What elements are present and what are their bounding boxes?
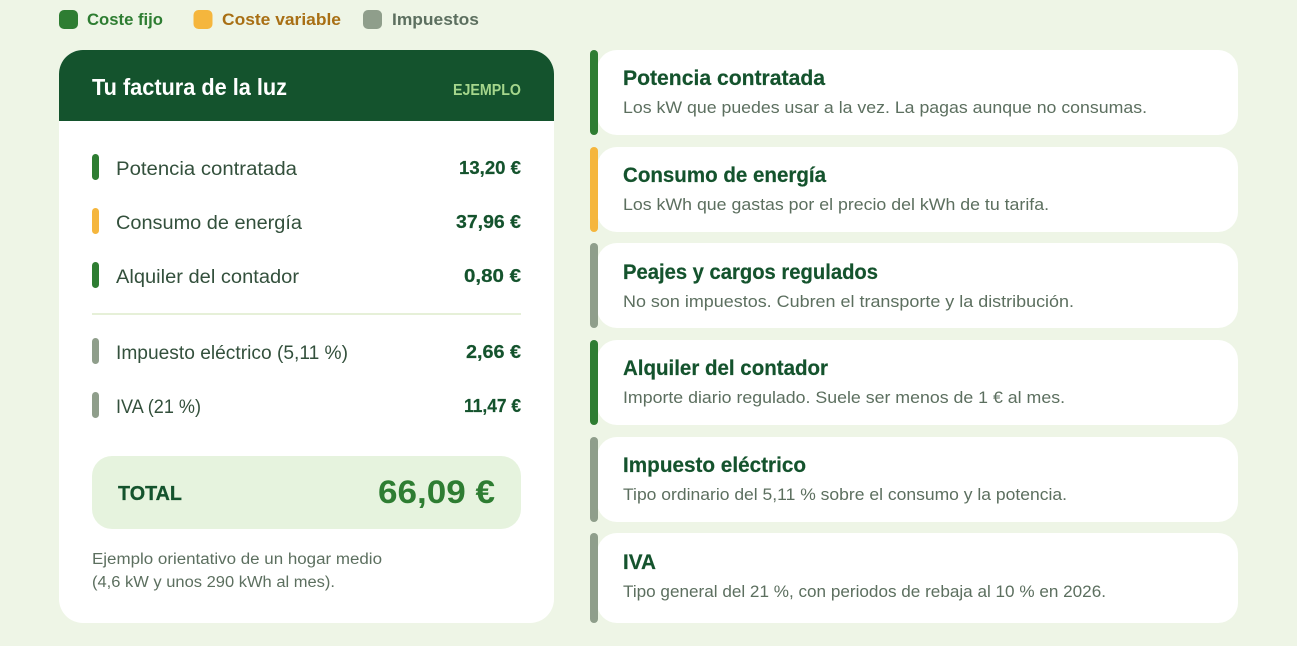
- total label: TOTAL: [118, 483, 182, 505]
- panel: impuesto electrico: Tipo ordinario del 5,11 % sobre el consumo y la potencia.: [623, 486, 1067, 504]
- panel: alquiler del contador: Importe diario regulado. Suele ser menos de 1 € al mes.: [623, 389, 1065, 407]
- row: potencia contratada: Potencia contratada: [116, 159, 297, 180]
- row: alquiler del contador: 0,80 €: [464, 265, 521, 286]
- row: iva: [92, 392, 521, 418]
- footnote: Ejemplo orientativo de un hogar medio: [92, 551, 382, 568]
- panel: consumo de energia: Consumo de energía: [623, 164, 826, 187]
- panel: peajes y cargos: Peajes y cargos regulados: [623, 261, 878, 284]
- row: potencia contratada: 13,20 €: [459, 157, 521, 178]
- panel: consumo de energia: Los kWh que gastas por el precio del kWh de tu tarifa.: [623, 196, 1049, 214]
- row: iva: 11,47 €: [464, 395, 521, 416]
- panel: consumo de energia: [590, 147, 1238, 232]
- legend: [59, 10, 479, 29]
- legend item: impuestos: Impuestos: [392, 10, 479, 29]
- legend item: coste variable: Coste variable: [222, 10, 341, 29]
- panel: alquiler del contador: [590, 340, 1238, 425]
- panel: potencia contratada: [590, 50, 1238, 135]
- panel: bill: [59, 50, 554, 623]
- panel: peajes y cargos: [590, 243, 1238, 328]
- panel: impuesto electrico: Impuesto eléctrico: [623, 454, 806, 477]
- panel: alquiler del contador: Alquiler del contador: [623, 357, 828, 380]
- panel: iva: Tipo general del 21 %, con periodos de rebaja al 10 % en 2026.: [623, 583, 1106, 601]
- row: impuesto electrico: [92, 338, 521, 364]
- row: consumo de energia: [92, 208, 521, 234]
- row: alquiler del contador: Alquiler del contador: [116, 267, 300, 288]
- row: consumo de energia: 37,96 €: [456, 211, 521, 232]
- row: potencia contratada: [92, 154, 521, 180]
- panel: impuesto electrico: [590, 437, 1238, 522]
- row: consumo de energia: Consumo de energía: [116, 213, 302, 234]
- panel: potencia contratada: Potencia contratada: [623, 67, 825, 90]
- total box: [92, 456, 521, 529]
- row: alquiler del contador: [92, 262, 521, 288]
- footnote: (4,6 kW y unos 290 kWh al mes).: [92, 574, 335, 591]
- panel: iva: IVA: [623, 551, 656, 574]
- footnote: [92, 551, 382, 591]
- example tag: EJEMPLO: [453, 82, 521, 99]
- row: impuesto electrico: Impuesto eléctrico (5,11 %): [116, 343, 348, 364]
- bill title: Tu factura de la luz: [92, 74, 287, 100]
- row: impuesto electrico: 2,66 €: [466, 341, 521, 362]
- panel: iva: [590, 533, 1238, 623]
- row: iva: IVA (21 %): [116, 397, 201, 418]
- panel: potencia contratada: Los kW que puedes usar a la vez. La pagas aunque no consumas.: [623, 99, 1147, 117]
- panel: peajes y cargos: No son impuestos. Cubren el transporte y la distribución.: [623, 293, 1074, 311]
- total amount: 66,09 €: [378, 474, 495, 510]
- legend item: coste fijo: Coste fijo: [87, 10, 163, 29]
- bill header: [59, 50, 554, 121]
